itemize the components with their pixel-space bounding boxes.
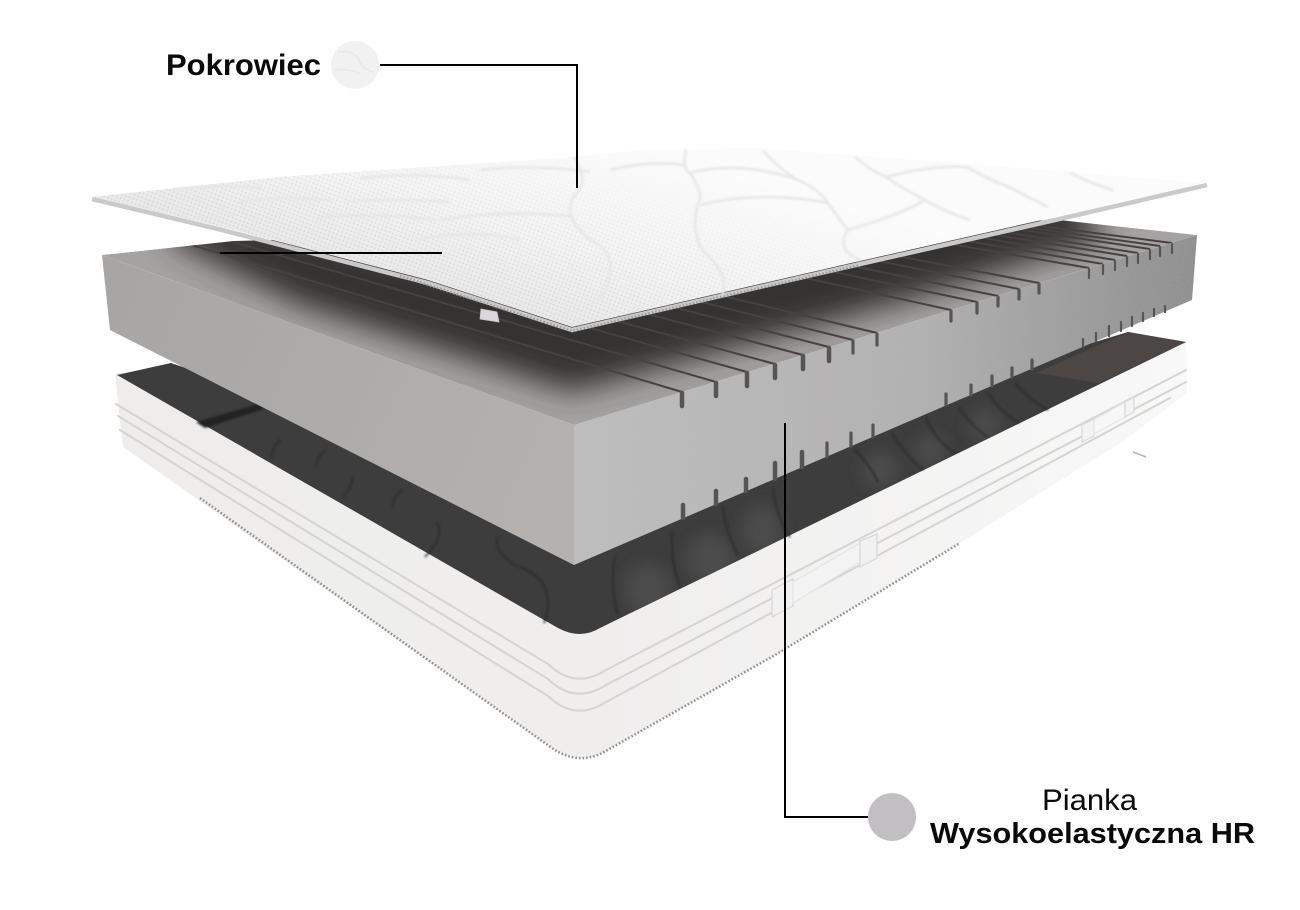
cover zip stitching: [400, 265, 860, 331]
far right interior tint: [1036, 332, 1186, 383]
swatch: cover: [331, 41, 379, 89]
mattress outer shell: [115, 333, 1187, 758]
mattress bottom zip edge: [200, 498, 960, 758]
top groove lines: [190, 224, 1172, 392]
cover label tag: [480, 309, 499, 322]
top base: [102, 220, 1197, 425]
callout: Pianka Wysokoelastyczna HR: [785, 423, 1255, 850]
mattress side stripes: [116, 370, 1186, 711]
swatch: foam: [868, 793, 916, 841]
leader line: cover: [380, 65, 577, 188]
foam top face: [102, 220, 1196, 425]
foam right face: [574, 235, 1197, 565]
label: Pianka: Pianka: [1042, 784, 1137, 817]
bottom mattress base: [115, 332, 1187, 758]
quilted cover layer: [92, 148, 1207, 331]
foam upper notches: [682, 244, 1172, 406]
cover zip edge: [92, 185, 1207, 330]
shadow cast by cover: [170, 190, 1110, 392]
foam lower notches: [683, 306, 1165, 518]
cover quilting seams: [171, 150, 1113, 300]
small stray mark: [1133, 452, 1146, 457]
infographic canvas: [92, 41, 1254, 849]
mattress dark interior: [117, 332, 1186, 634]
foam layer: [102, 188, 1197, 565]
label: Wysokoelastyczna HR: Wysokoelastyczna HR: [930, 818, 1255, 850]
interior pillow highlights: [624, 409, 1001, 616]
stray horizontal marker line: [220, 252, 442, 254]
heading: Pokrowiec: Pokrowiec: [166, 49, 321, 82]
foam left face: [102, 255, 574, 565]
leader line: foam: [785, 423, 868, 817]
cover top surface: [92, 148, 1206, 327]
dark crease: [196, 404, 264, 428]
cover knit texture: [94, 166, 814, 326]
interior quilting seams: [272, 383, 1048, 623]
callout: Pokrowiec: [166, 41, 577, 188]
side carry handle: [1082, 397, 1134, 442]
front carry handle: [772, 534, 877, 617]
